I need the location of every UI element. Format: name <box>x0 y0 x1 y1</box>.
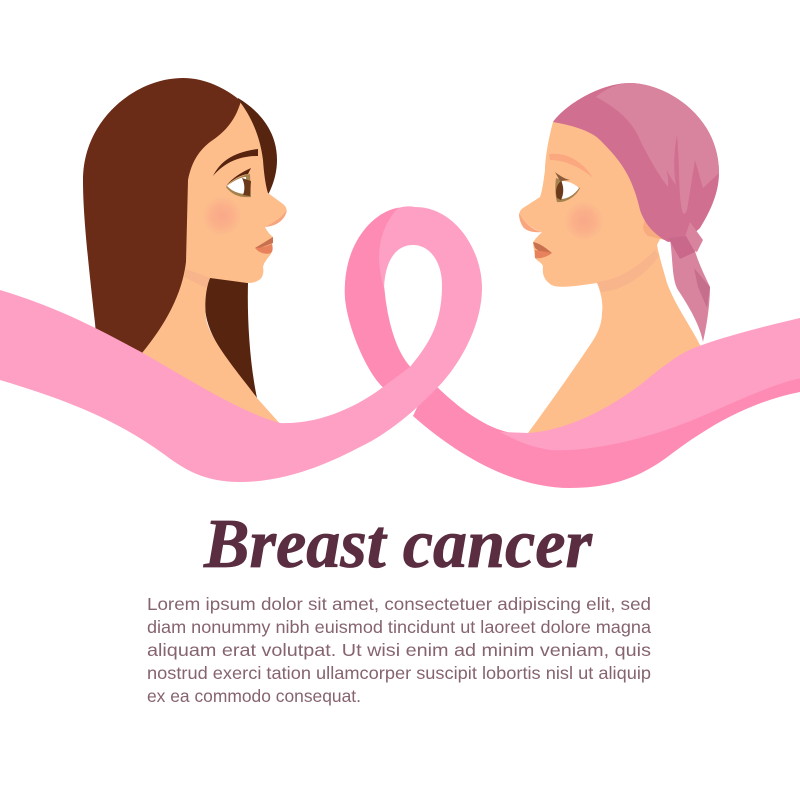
illustration: healthy woman with long hair <box>83 78 287 426</box>
lips <box>255 237 273 254</box>
ribbon: right strand shadow <box>413 378 800 488</box>
scarf knot <box>668 222 703 259</box>
ribbon: right strand highlight <box>500 318 800 450</box>
ribbon: left band and loop <box>0 206 482 482</box>
title: Breast cancer <box>203 506 593 583</box>
body text: aliquam erat volutpat. Ut wisi enim ad minim veniam, quis <box>147 640 651 660</box>
pink awareness ribbon <box>0 206 800 488</box>
body text: nostrud exerci tation ullamcorper suscipit lobortis nisl ut aliquip <box>147 663 651 683</box>
body text: ex ea commodo consequat. <box>147 686 361 706</box>
eye <box>226 168 251 197</box>
body text <box>147 594 651 706</box>
lips <box>533 242 552 258</box>
scarf <box>553 83 719 242</box>
scarf tail <box>670 238 710 342</box>
body text: Lorem ipsum dolor sit amet, consectetuer adipiscing elit, sed <box>147 594 651 614</box>
illustration: woman in pink headscarf <box>519 83 719 433</box>
eyebrow <box>549 154 593 178</box>
eye <box>555 172 580 202</box>
body text: diam nonummy nibh euismod tincidunt ut laoreet dolore magna <box>147 617 651 637</box>
ribbon: loop shadow <box>345 208 410 387</box>
eyebrow <box>213 149 258 176</box>
